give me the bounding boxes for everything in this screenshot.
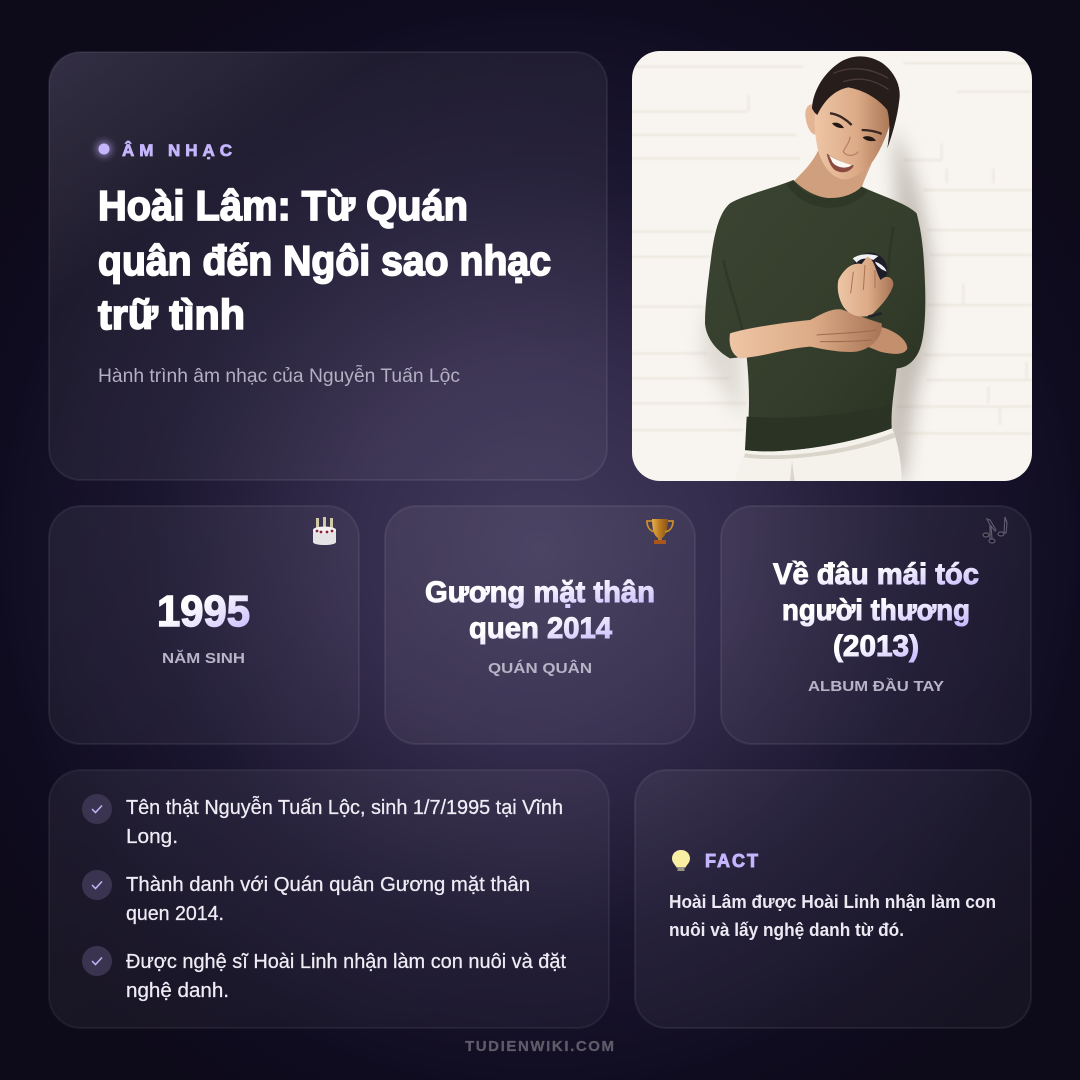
bullet 1: Long. (126, 826, 178, 848)
collar and hem ribbing (787, 180, 867, 208)
fact text (669, 892, 996, 940)
bullet 2: quen 2014. (126, 903, 224, 925)
stat value: Về đâu mái tóc (773, 558, 979, 591)
bullet 2: Thành danh với Quán quân Gương mặt thân (126, 874, 530, 896)
right forearm (868, 327, 908, 354)
face (815, 85, 892, 179)
neck (793, 150, 872, 198)
stat card: champion (385, 506, 695, 744)
icon: trophy (647, 519, 673, 544)
stat card: birth year (49, 506, 359, 744)
eyes and brows (830, 113, 882, 134)
stat label: ALBUM ĐẦU TAY (808, 678, 944, 695)
stat value (425, 576, 655, 645)
held ball (854, 252, 888, 280)
ear (805, 104, 817, 135)
bullet 3: Được nghệ sĩ Hoài Linh nhận làm con nuôi và đặt (126, 951, 566, 973)
panel: hero title (49, 52, 607, 480)
panel: fact (635, 770, 1031, 1028)
icon: music notes (983, 517, 1007, 543)
footer watermark: TUDIENWIKI.COM (465, 1038, 614, 1055)
title: quân đến Ngôi sao nhạc (98, 237, 551, 284)
title: Hoài Lâm: Từ Quán (98, 182, 468, 229)
smile (827, 153, 854, 172)
bullet 3: nghệ danh. (126, 980, 229, 1002)
bullet 3 (82, 946, 566, 1002)
hair (812, 56, 900, 148)
stat value: quen 2014 (469, 612, 612, 645)
icon: light bulb (672, 850, 690, 871)
trousers (876, 426, 902, 481)
stat value: 1995 (157, 587, 250, 636)
stat label: NĂM SINH (162, 650, 245, 667)
icon: birthday cake (313, 517, 336, 545)
brick wall joints (632, 63, 1032, 433)
title: trữ tình (98, 291, 245, 338)
title (98, 182, 551, 338)
category tag: ÂM NHẠC (122, 141, 232, 160)
stat value: (2013) (833, 630, 919, 663)
clasping arm and hand (730, 309, 882, 358)
subtitle: Hành trình âm nhạc của Nguyễn Tuấn Lộc (98, 365, 460, 387)
wall shadow behind body (883, 127, 932, 480)
fact text: Hoài Lâm được Hoài Linh nhận làm con (669, 892, 996, 912)
bullet 1: Tên thật Nguyễn Tuấn Lộc, sinh 1/7/1995 tại Vĩnh (126, 796, 563, 819)
raised fist (838, 257, 893, 317)
photo: portrait of Hoài Lâm against a white brick wall (632, 51, 1032, 482)
fact text: nuôi và lấy nghệ danh từ đó. (669, 920, 904, 940)
stat value (773, 558, 979, 663)
bullet 1 (82, 794, 563, 848)
stat value: người thương (782, 594, 970, 627)
sweater (705, 180, 925, 451)
fact heading: FACT (705, 851, 758, 871)
stat label: QUÁN QUÂN (488, 659, 592, 677)
stat value: Gương mặt thân (425, 576, 655, 609)
panel: key points (49, 770, 609, 1028)
bullet 2 (82, 870, 530, 925)
stat card: debut album (721, 506, 1031, 744)
